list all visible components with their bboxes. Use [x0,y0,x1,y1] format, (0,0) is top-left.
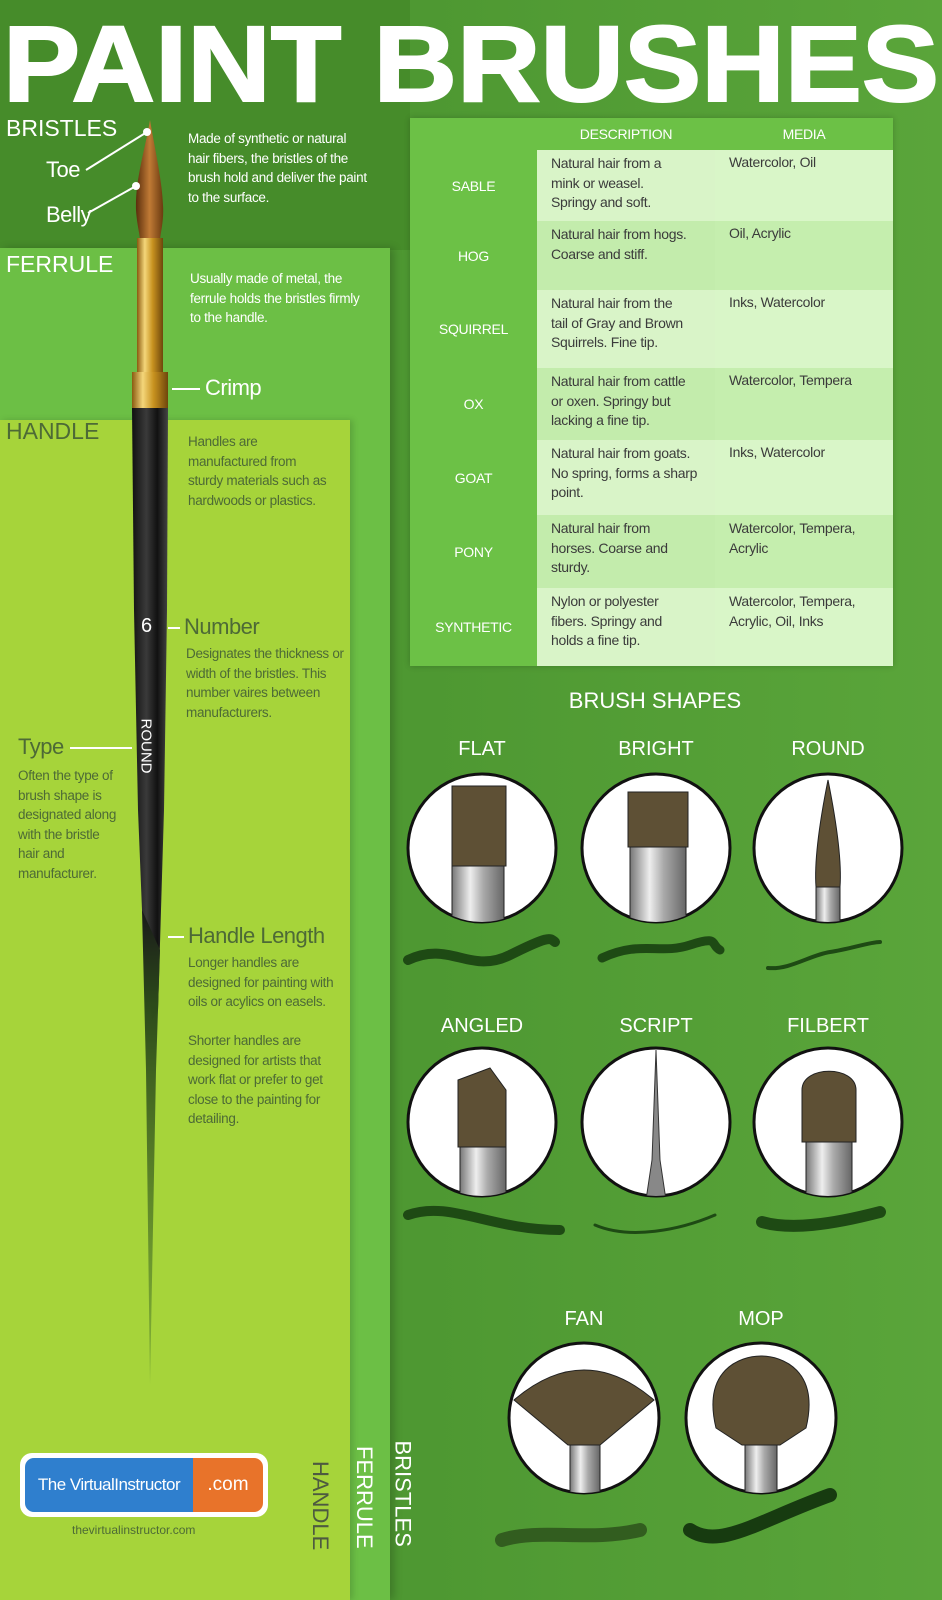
text: handle length description: Longer handles are designed for painting with oils or acylics on easels. [188,955,333,1009]
brush circles [403,772,904,1547]
brush shape labels: FLAT [458,738,506,760]
table: hair types: Nylon or polyester fibers. Springy and holds a fine tip. [551,593,662,648]
panel: ferrule [0,248,390,1600]
round on handle: ROUND [138,718,154,774]
icon: bright brush [582,774,730,945]
vertical label bristles: BRISTLES [390,1440,416,1547]
label: toe: Toe [46,157,80,182]
table: hair types: Oil, Acrylic [729,225,791,241]
table: hair types: Natural hair from horses. Coarse and sturdy. [551,520,668,575]
table: hair types: Watercolor, Tempera, Acrylic, Oil, Inks [729,593,855,628]
strokes [408,939,880,1540]
table: hair types: Natural hair from hogs. Coarse and stiff. [551,226,686,262]
text: number description: Designates the thickness or width of the bristles. This number vaires between manufacturers. [186,646,344,720]
icon: flat brush [408,774,556,945]
vertical labels: HANDLE [308,1461,333,1550]
table: hair types [410,118,893,666]
table: hair types: Natural hair from a mink or weasel. Springy and soft. [551,155,661,210]
table: hair types: Watercolor, Tempera, Acrylic [729,520,855,556]
text: website: thevirtualinstructor.com [72,1523,195,1537]
table: hair types: Inks, Watercolor [729,294,825,310]
label fan: FAN [565,1308,603,1330]
table: hair types: Watercolor, Oil [729,154,816,170]
table: hair types: PONY [454,544,493,560]
label angled: ANGLED [441,1015,523,1037]
table: hair types: SQUIRREL [439,321,508,337]
text: handle description: Handles are manufactured from sturdy materials such as hardwoods or plastics. [188,434,326,508]
brush illustration [132,120,168,1378]
label: number: Number [184,614,259,639]
text: type description: Often the type of brush shape is designated along with the bristle hair and manufacturer. [18,768,116,880]
table: hair types: SYNTHETIC [435,619,512,635]
table: hair types: Inks, Watercolor [729,444,825,460]
text: handle length description [188,955,333,1126]
panel: bristles band [0,0,410,250]
table: hair types: Watercolor, Tempera [729,372,852,388]
label: ferrule: FERRULE [6,251,113,277]
table: hair types: Natural hair from cattle or oxen. Springy but lacking a fine tip. [551,373,685,428]
label bright: BRIGHT [618,738,694,760]
icon: script brush [582,1048,730,1200]
text: handle length description: Shorter handles are designed for artists that work flat or prefer to get close to the painting for detailing. [188,1033,323,1126]
table: hair types: Natural hair from goats. No spring, forms a sharp point. [551,445,697,500]
labels: bristles: BRISTLES [6,115,117,141]
label: crimp: Crimp [205,375,261,400]
heading: brush shapes: BRUSH SHAPES [569,688,741,713]
vertical label ferrule: FERRULE [352,1446,377,1549]
label: type: Type [18,734,64,759]
table: hair types: MEDIA [783,126,825,142]
table: hair types: GOAT [455,470,492,486]
label: handle: HANDLE [6,418,99,444]
logo: .com [207,1474,249,1495]
logo: The VirtualInstructor [38,1475,180,1494]
logo [20,1453,268,1517]
label script: SCRIPT [619,1015,693,1037]
table: hair types: SABLE [452,178,495,194]
number on handle: 6 [141,615,152,637]
icon: angled brush [406,1046,558,1198]
text: ferrule description: Usually made of metal, the ferrule holds the bristles firmly to the handle. [190,271,359,325]
pointer lines top [86,128,151,214]
label mop: MOP [738,1308,784,1330]
text: bristles description: Made of synthetic or natural hair fibers, the bristles of the brush hold and deliver the paint to the surface. [188,131,367,204]
table: hair types: HOG [458,248,489,264]
label filbert: FILBERT [787,1015,869,1037]
icon: mop brush [686,1343,836,1510]
table: hair types: Natural hair from the tail of Gray and Brown Squirrels. Fine tip. [551,295,683,350]
table: hair types: OX [464,396,483,412]
label round: ROUND [791,738,865,760]
icon: round brush [754,774,902,945]
label: handle length: Handle Length [188,923,325,948]
icon: filbert brush [752,1046,904,1198]
table: hair types: DESCRIPTION [580,126,672,142]
panel: handle [0,420,350,1600]
label: belly: Belly [46,202,91,227]
icon: fan brush [509,1343,659,1510]
